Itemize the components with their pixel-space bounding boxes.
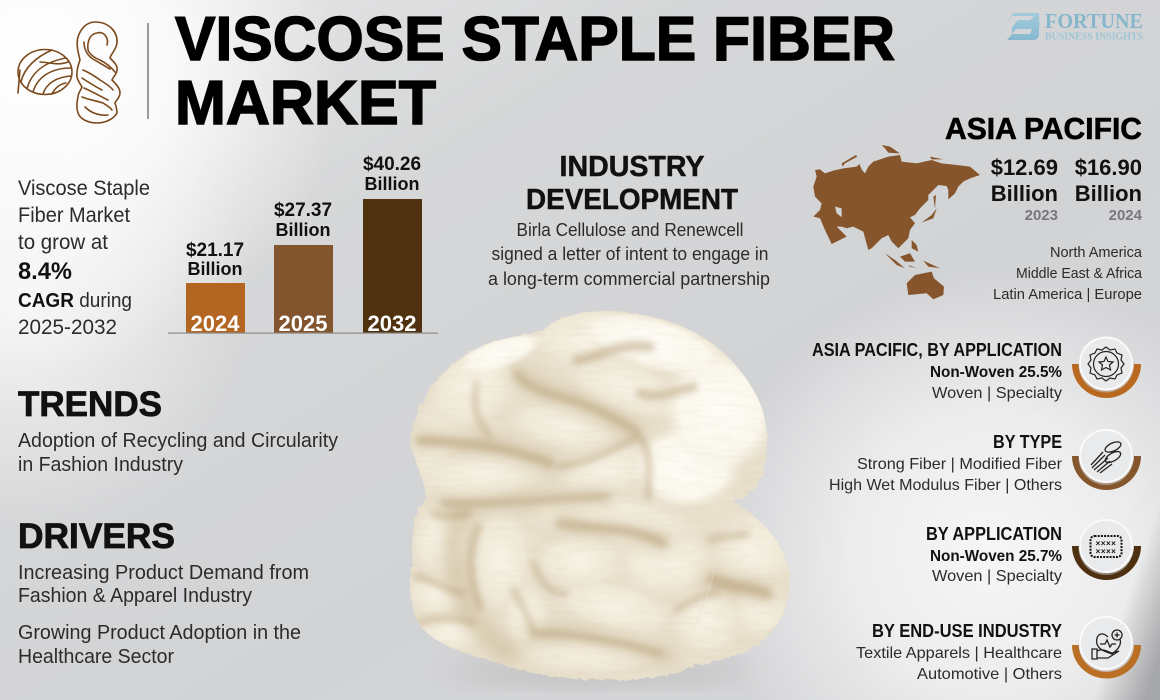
bar 2024: 2024: [191, 311, 240, 336]
industry development: Birla Cellulose and Renewcell: [516, 220, 744, 240]
industry development: DEVELOPMENT: [526, 184, 738, 216]
icon: yarn ball: [18, 50, 72, 94]
bright outer coil: [464, 312, 766, 506]
segment: Asia Pacific by application: Non-Woven 25.5%: [930, 364, 1062, 381]
logo icon: yarn ball and skein: [18, 22, 120, 123]
asia pacific panel: $12.69: [991, 155, 1058, 180]
bar 2024: Billion: [188, 259, 242, 279]
market growth text: Fiber Market: [18, 204, 130, 227]
logo: Fortune Business Insights: BUSINESS INSIGHTS: [1045, 32, 1143, 42]
segment: by end-use industry: Automotive | Others: [917, 666, 1062, 683]
bar 2032: Billion: [364, 174, 420, 194]
bar 2025: Billion: [276, 220, 330, 240]
bar 2032: [363, 154, 422, 336]
segment: by end-use industry: Textile Apparels | Healthcare: [856, 645, 1062, 662]
market growth text: Viscose Staple: [18, 177, 150, 200]
segment: by end-use industry: BY END-USE INDUSTRY: [872, 621, 1062, 641]
segment: by end-use industry: [856, 617, 1141, 683]
drivers: Fashion & Apparel Industry: [18, 585, 252, 607]
drivers: Growing Product Adoption in the: [18, 622, 301, 644]
broad warm shading: [423, 373, 767, 657]
map: Asia Pacific: [813, 145, 980, 299]
asia pacific panel: North America: [1050, 244, 1143, 261]
divider: [147, 23, 149, 119]
segment: by type: [829, 430, 1141, 494]
segment: Asia Pacific by application: [812, 338, 1141, 402]
title: [175, 5, 895, 138]
segment: by type: Strong Fiber | Modified Fiber: [857, 456, 1063, 473]
industry development: signed a letter of intent to engage in: [492, 244, 768, 264]
icon: fiber bundle: [1072, 430, 1141, 490]
bar 2024: $21.17: [186, 240, 244, 261]
fine fiber texture: [508, 358, 732, 472]
trends: in Fashion Industry: [18, 454, 183, 476]
strand lobes: [403, 307, 800, 680]
industry development: a long-term commercial partnership: [488, 269, 770, 289]
tan creases: [417, 346, 767, 653]
industry development: [488, 151, 770, 289]
asia pacific panel: [945, 111, 1143, 303]
market growth text: 8.4%: [18, 258, 72, 285]
fiber shadow: [450, 660, 750, 684]
segment: by application: BY APPLICATION: [926, 524, 1062, 544]
title: MARKET: [175, 69, 436, 138]
logo mark: [1007, 13, 1040, 40]
title: VISCOSE STAPLE FIBER: [175, 5, 895, 74]
drivers: Increasing Product Demand from: [18, 562, 309, 584]
icon: non-woven fabric: [1072, 520, 1141, 580]
asia pacific panel: Middle East & Africa: [1016, 265, 1143, 282]
icon: healthcare hand: [1072, 617, 1141, 678]
bar 2025: [274, 200, 333, 336]
segment: by application: Woven | Specialty: [932, 568, 1062, 585]
logo: Fortune Business Insights: [1007, 9, 1143, 42]
asia pacific panel: Billion: [991, 181, 1058, 206]
segment: by type: BY TYPE: [993, 432, 1062, 452]
drivers: DRIVERS: [18, 517, 175, 556]
market growth text: CAGR during: [18, 290, 132, 312]
stray fibers: [533, 351, 717, 653]
icon: yarn skein: [77, 22, 120, 123]
asia pacific panel: ASIA PACIFIC: [945, 111, 1142, 146]
icon: non-woven fabric: ××××: [1096, 539, 1116, 548]
segment: by application: [926, 520, 1141, 585]
logo: Fortune Business Insights: FORTUNE: [1045, 9, 1143, 33]
asia pacific panel: 2024: [1109, 207, 1143, 224]
segment: Asia Pacific by application: Woven | Specialty: [932, 385, 1062, 402]
bar chart: market size: [168, 154, 438, 336]
market growth text: [18, 177, 150, 339]
bar 2032: $40.26: [363, 154, 421, 175]
segment: by application: Non-Woven 25.7%: [930, 548, 1062, 565]
bar 2032: 2032: [368, 311, 416, 336]
bar 2025: $27.37: [274, 200, 332, 221]
asia pacific panel: Billion: [1075, 181, 1142, 206]
asia pacific panel: 2023: [1025, 207, 1058, 224]
icon: non-woven fabric: ××××: [1096, 547, 1116, 556]
bar 2024: [186, 240, 245, 336]
image: viscose fiber bundle: [400, 295, 800, 697]
asia pacific panel: $16.90: [1075, 155, 1142, 180]
trends: Adoption of Recycling and Circularity: [18, 430, 338, 452]
market growth text: 2025-2032: [18, 316, 117, 339]
industry development: INDUSTRY: [560, 151, 704, 183]
segment: by type: High Wet Modulus Fiber | Others: [829, 477, 1062, 494]
trends: [18, 385, 338, 476]
icon: quality badge: [1072, 338, 1141, 398]
asia pacific panel: Latin America | Europe: [993, 286, 1142, 303]
drivers: Healthcare Sector: [18, 646, 174, 668]
drivers: [18, 517, 309, 668]
trends: TRENDS: [18, 385, 162, 424]
segment: Asia Pacific by application: ASIA PACIFIC, BY APPLICATION: [812, 340, 1062, 360]
bar 2025: 2025: [279, 311, 327, 336]
market growth text: to grow at: [18, 231, 108, 254]
